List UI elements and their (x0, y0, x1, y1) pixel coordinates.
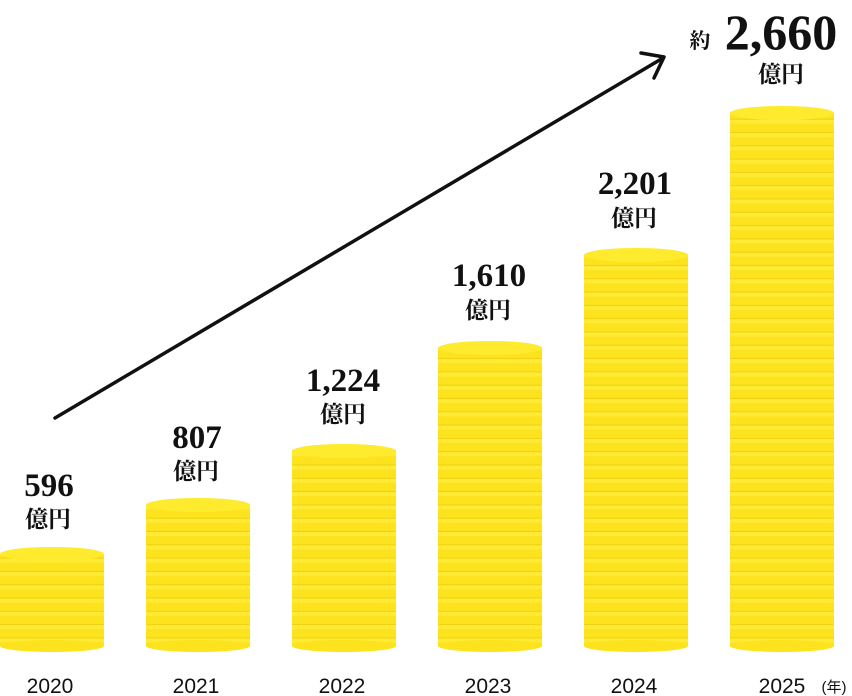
label 2024: 2,201 (598, 166, 672, 202)
label 2021: 807 (172, 420, 222, 456)
label 2022: 1,224 (306, 363, 380, 399)
label 2021 (172, 420, 222, 484)
arrow (55, 53, 664, 418)
stack 2023 (438, 341, 542, 652)
stack 2025 (730, 106, 834, 652)
label 2023: 億円 (465, 298, 511, 323)
label 2022: 億円 (320, 402, 366, 427)
label 2025: 億円 (758, 62, 804, 87)
label 2020: 596 (24, 468, 74, 504)
year axis: (年) (822, 679, 846, 696)
label 2025 (690, 4, 837, 87)
stack 2021 (146, 498, 250, 652)
stack 2024 (584, 248, 688, 652)
label 2020: 億円 (25, 507, 71, 532)
label 2025: 2,660 (725, 4, 837, 60)
label 2025: 約 (690, 29, 710, 53)
label 2024 (598, 166, 672, 231)
label 2023: 1,610 (452, 258, 526, 294)
label 2021: 億円 (173, 459, 219, 484)
stack 2022 (292, 444, 396, 652)
label 2024: 億円 (611, 206, 657, 231)
stack 2020 (0, 547, 104, 652)
year axis (27, 675, 846, 696)
label 2022 (306, 363, 380, 427)
label 2020 (24, 468, 74, 532)
label 2023 (452, 258, 526, 323)
